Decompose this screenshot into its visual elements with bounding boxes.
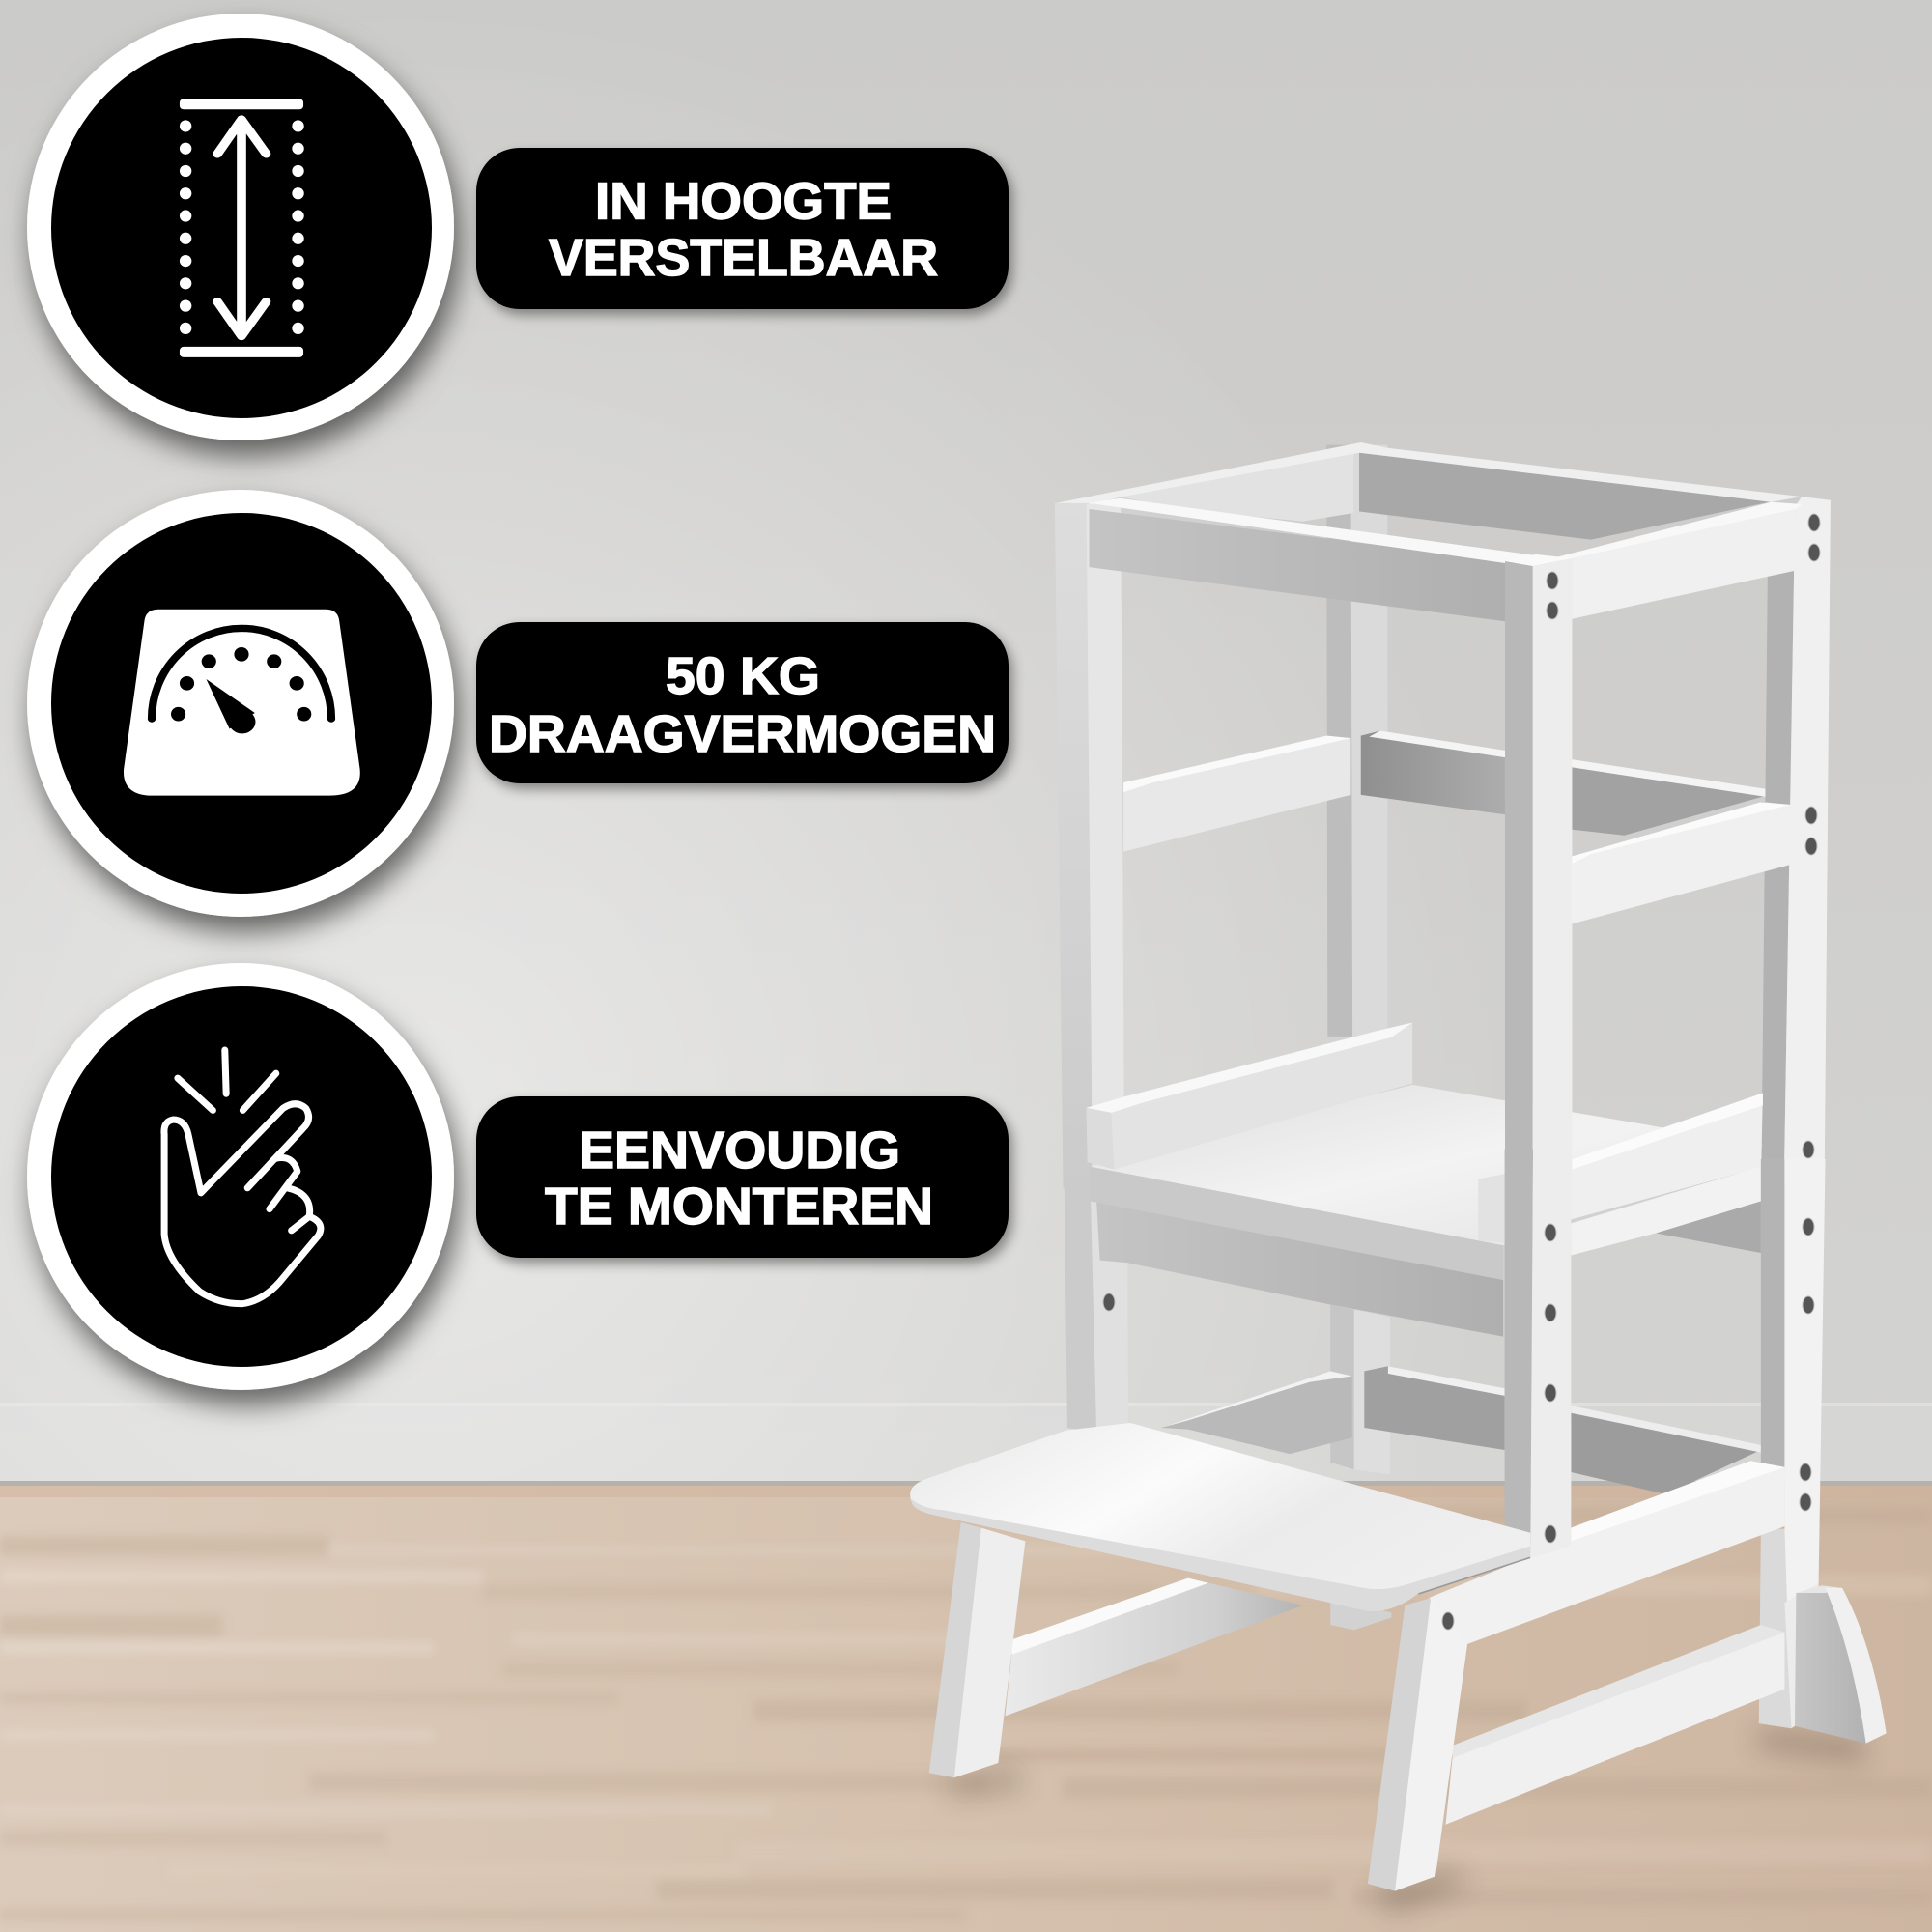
floor shadows under tower xyxy=(942,1729,1864,1913)
pill: in hoogte verstelbaar: IN HOOGTE xyxy=(595,173,892,231)
icon: snapping fingers hand xyxy=(164,1050,321,1304)
badge: easy assembly icon circle xyxy=(27,963,454,1390)
pill: in hoogte verstelbaar xyxy=(476,148,1009,309)
pill: 50 kg draagvermogen: 50 KG xyxy=(666,647,820,705)
tower: rear lower structure xyxy=(1064,1159,1761,1630)
pill: eenvoudig te monteren: EENVOUDIG xyxy=(579,1122,900,1179)
background: wooden floor xyxy=(0,1486,1932,1932)
pill: in hoogte verstelbaar: VERSTELBAAR xyxy=(549,229,938,287)
background: wall xyxy=(0,0,1932,1488)
tower: front posts, step and legs xyxy=(910,1150,1887,1891)
learning tower xyxy=(910,442,1887,1891)
tower: upper frame xyxy=(1055,442,1831,1245)
pill: eenvoudig te monteren: TE MONTEREN xyxy=(545,1178,933,1236)
badge: height icon circle xyxy=(27,14,454,440)
icon: weighing scale xyxy=(124,610,360,796)
pill: 50 kg draagvermogen: DRAAGVERMOGEN xyxy=(489,705,996,763)
tower: screw holes xyxy=(1103,514,1820,1630)
pill: eenvoudig te monteren xyxy=(476,1096,1009,1258)
icon: height adjustment arrows xyxy=(180,99,304,357)
pill: 50 kg draagvermogen xyxy=(476,622,1009,783)
badge: weight icon circle xyxy=(27,490,454,917)
